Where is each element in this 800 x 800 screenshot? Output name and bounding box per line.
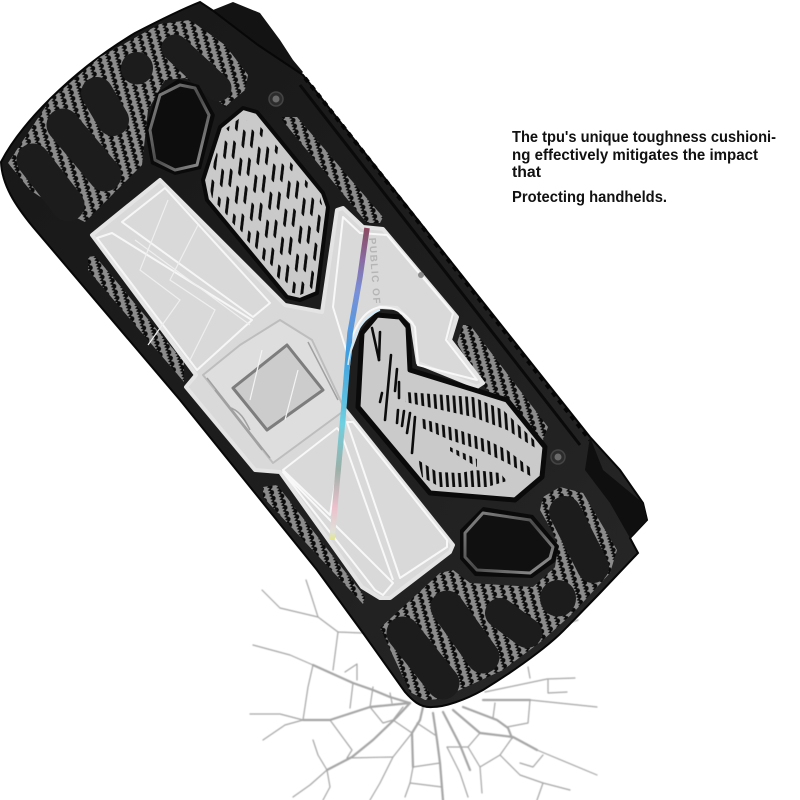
carbon strip: left lower xyxy=(263,485,365,604)
inner rim highlight xyxy=(300,85,580,445)
analog stick: bottom xyxy=(460,507,559,578)
caption text: ng effectively mitigates the impact xyxy=(512,147,759,164)
curved light line xyxy=(348,310,380,365)
panel frame: upper left white outlines xyxy=(97,188,270,370)
lower shoulder bumper xyxy=(585,437,647,538)
screw: top xyxy=(269,92,283,106)
handheld case xyxy=(1,2,647,707)
caption text: The tpu's unique toughness cushioni- xyxy=(512,129,776,146)
carbon strip: right lower xyxy=(457,325,548,440)
carbon strip: left upper xyxy=(88,256,184,382)
carbon strip: right upper xyxy=(282,117,383,223)
carbon panel: top left xyxy=(8,20,248,222)
panel frame: upper right white outline xyxy=(333,217,477,380)
caption text xyxy=(512,129,776,206)
cracked ground behind handheld xyxy=(250,580,597,800)
grip pads: bottom right xyxy=(403,512,593,683)
top vented grille xyxy=(200,105,335,305)
serrated right edge xyxy=(305,78,590,440)
caption text: that xyxy=(512,164,542,181)
panel lettering: PUBLIC OF xyxy=(366,237,382,305)
caption text: Protecting handhelds. xyxy=(512,189,667,206)
transparent back panel xyxy=(92,180,483,598)
screw: bottom xyxy=(551,450,565,464)
case body outline xyxy=(1,2,647,707)
lower vented grille with logo xyxy=(358,315,545,500)
grip pads: top left xyxy=(33,48,218,205)
analog stick: top xyxy=(145,79,215,175)
panel frame: lower white outlines xyxy=(283,422,447,595)
top shoulder bumper xyxy=(205,2,303,92)
rainbow light strip xyxy=(332,228,367,540)
small pin xyxy=(418,272,424,278)
carbon panel: bottom right xyxy=(380,487,617,700)
panel frame: faint inner lines xyxy=(135,200,250,360)
kickstand xyxy=(203,320,345,463)
